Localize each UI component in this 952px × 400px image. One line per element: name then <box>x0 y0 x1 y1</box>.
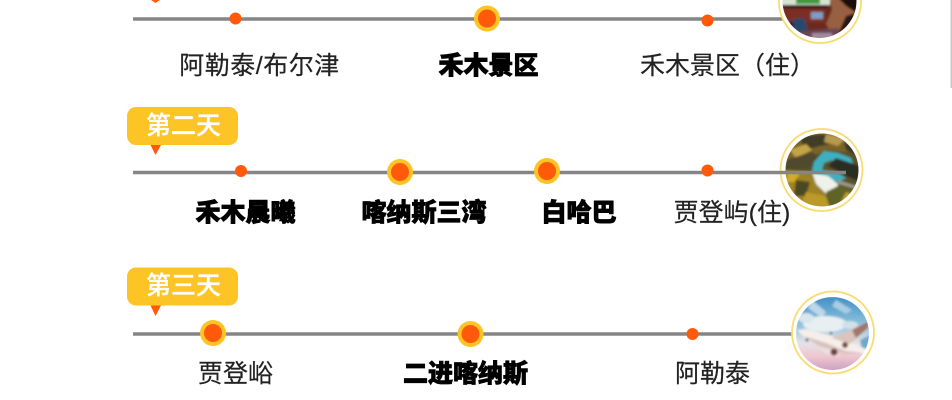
day 2 stop: 白哈巴: 白哈巴 <box>541 199 617 227</box>
day 1 stop: 阿勒泰/布尔津: 阿勒泰/布尔津 <box>179 52 340 80</box>
day 2 route <box>127 107 862 227</box>
day 3 stop: 二进喀纳斯: 二进喀纳斯 <box>403 359 528 388</box>
day 1 route <box>133 0 861 80</box>
day 2 stop: 喀纳斯三湾 <box>361 159 487 227</box>
day 3 badge: 第三天 <box>146 272 221 300</box>
day 1 badge pointer tip <box>151 0 160 3</box>
day 1 stop: 禾木景区（住） <box>640 14 815 80</box>
day 3 photo: airplane in sky <box>792 292 874 374</box>
day 3 timeline <box>133 332 792 336</box>
day 1 stop: 禾木景区 highlighted <box>438 6 539 80</box>
day 2 photo: river valley <box>780 129 862 211</box>
day 2 stop: 禾木晨曦 <box>195 165 296 227</box>
day 1 stop: 禾木景区 highlighted: 禾木景区 <box>438 52 539 80</box>
day 2 badge: 第二天 <box>146 112 221 140</box>
day 1 stop: 阿勒泰/布尔津 <box>179 12 340 80</box>
day 1 stop: 禾木景区（住）: 禾木景区（住） <box>640 52 815 80</box>
day 3 badge <box>127 268 238 316</box>
day 2 timeline <box>133 171 846 174</box>
day 3 stop: 阿勒泰: 阿勒泰 <box>675 360 750 388</box>
day 1 timeline <box>133 17 785 21</box>
day 3 route <box>127 268 874 388</box>
day 3 stop: 二进喀纳斯 <box>403 321 528 388</box>
day 2 badge <box>127 107 238 155</box>
day 2 stop: 禾木晨曦: 禾木晨曦 <box>195 199 296 227</box>
day 3 stop: 贾登峪 <box>198 320 273 388</box>
day 3 stop: 阿勒泰 <box>675 328 750 388</box>
day 2 stop: 贾登屿(住) <box>674 164 790 227</box>
day 2 stop: 喀纳斯三湾: 喀纳斯三湾 <box>361 198 487 227</box>
day 1 photo: interior scene <box>779 0 861 43</box>
day 2 stop: 贾登屿(住): 贾登屿(住) <box>674 199 790 227</box>
day 3 stop: 贾登峪: 贾登峪 <box>198 360 273 388</box>
day 2 stop: 白哈巴 <box>534 158 617 227</box>
